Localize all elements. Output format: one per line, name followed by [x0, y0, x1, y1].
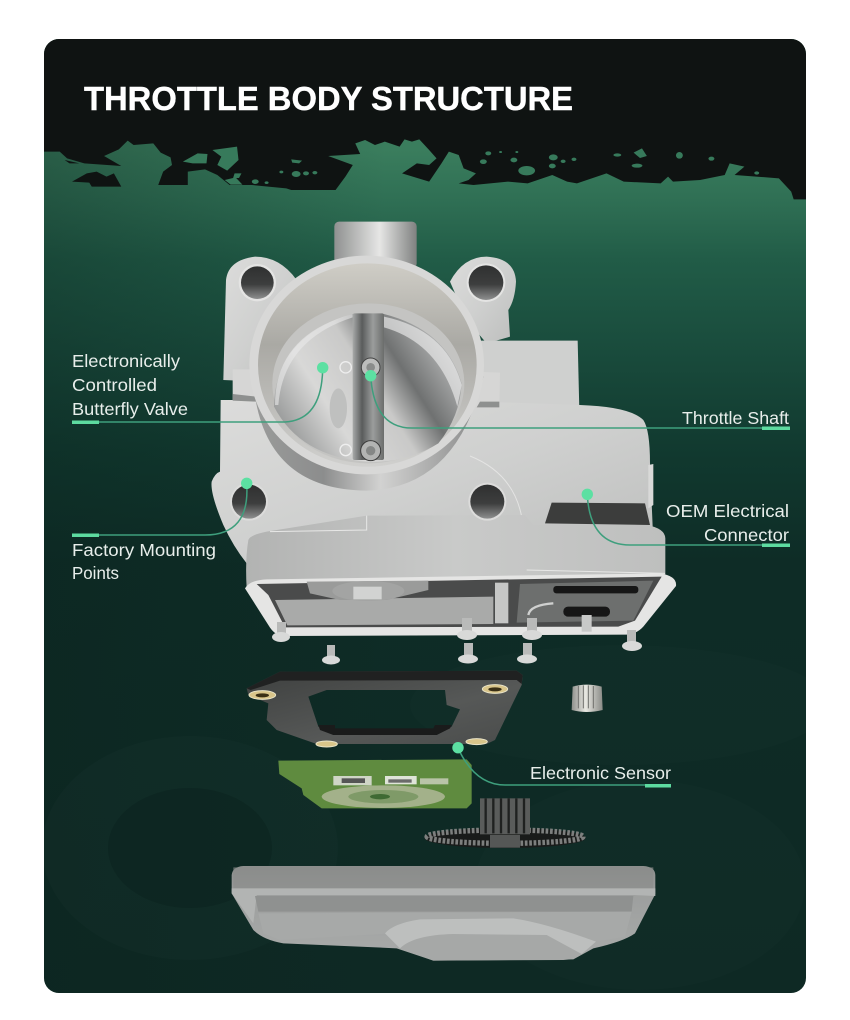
main casting — [211, 400, 653, 563]
throttle shaft — [353, 313, 384, 460]
callout: Throttle Shaft: Throttle Shaft — [682, 408, 789, 428]
callout: Electronically Controlled Butterfly Valve: Electronically — [72, 351, 180, 371]
callout: Electronically Controlled Butterfly Valve: Butterfly Valve — [72, 399, 188, 419]
mounting ears — [223, 257, 300, 383]
green circuit board — [278, 759, 472, 808]
callout: Factory Mounting Points: Factory Mounting — [72, 540, 216, 560]
brush-stroke header band — [44, 30, 811, 199]
callout: Electronically Controlled Butterfly Valve: Controlled — [72, 375, 157, 395]
large sector gear — [424, 798, 586, 848]
callout: Electronic Sensor — [452, 742, 671, 788]
throat tube — [255, 310, 483, 491]
callout: OEM Electrical Connector: Connector — [704, 525, 789, 545]
callout: Electronically Controlled Butterfly Valve — [72, 351, 328, 424]
callout: Throttle Shaft — [365, 370, 790, 430]
butterfly valve plate — [272, 303, 464, 463]
right block — [477, 341, 579, 413]
callout: OEM Electrical Connector — [582, 489, 790, 547]
underside frame — [245, 573, 676, 636]
exposed screws — [272, 618, 642, 664]
callout: Electronic Sensor: Electronic Sensor — [530, 763, 671, 783]
lower plate — [246, 515, 665, 588]
shaft screws — [361, 358, 381, 461]
underside cavity — [257, 577, 662, 627]
title: THROTTLE BODY STRUCTURE — [84, 81, 573, 118]
black gasket plate — [247, 671, 523, 747]
callout: Factory Mounting Points — [72, 478, 252, 583]
connector recess — [545, 503, 650, 525]
callout: Factory Mounting Points: Points — [72, 563, 119, 583]
silver bottom cover — [232, 866, 655, 961]
throat rim — [249, 256, 484, 474]
callout: OEM Electrical Connector: OEM Electrical — [666, 501, 789, 521]
top pipe nipple — [334, 222, 417, 268]
small pinion gear — [572, 685, 603, 712]
decorative background circles — [42, 645, 830, 990]
exploded lower components — [232, 671, 655, 961]
lower boss outline — [470, 456, 522, 517]
bolt holes — [230, 263, 506, 521]
side pad tabs — [233, 369, 500, 407]
main throttle body assembly — [211, 222, 676, 636]
